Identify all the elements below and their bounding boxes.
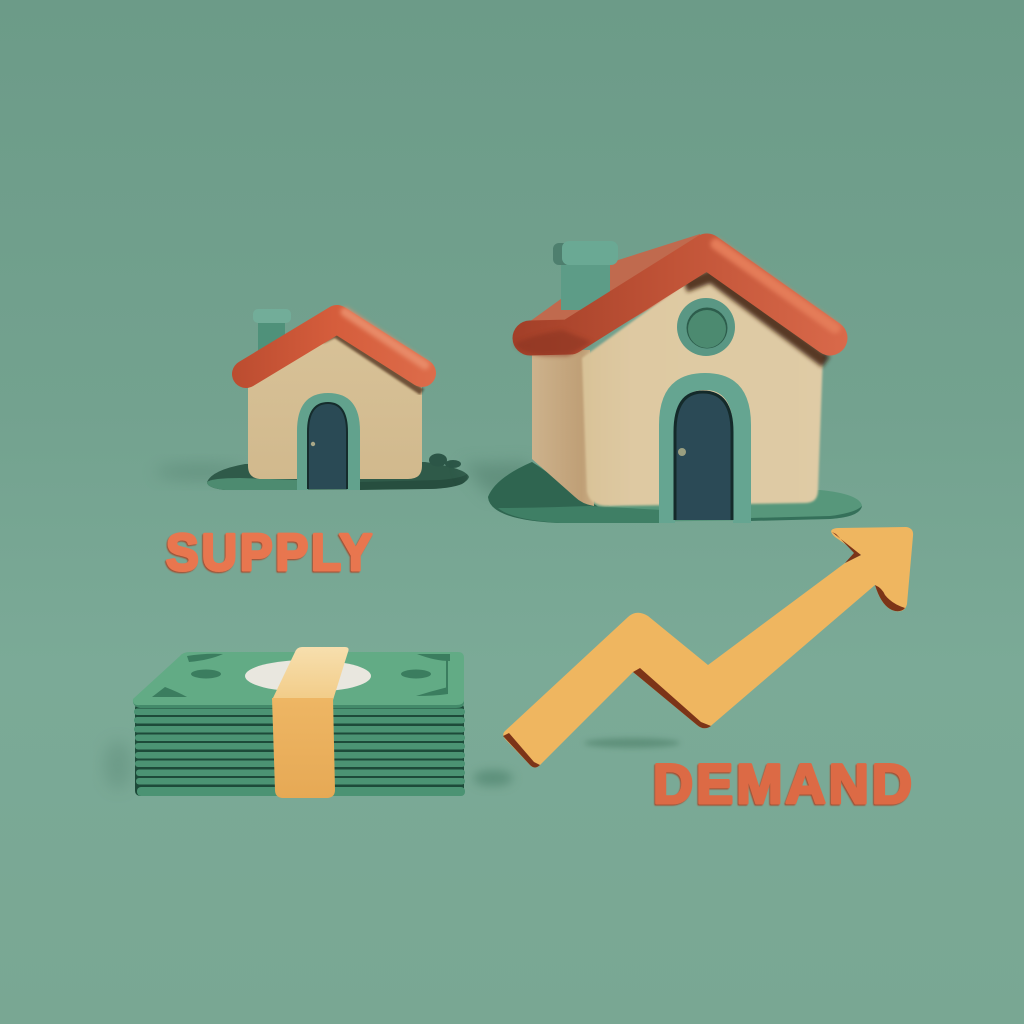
large house round window	[677, 298, 735, 356]
arrow shaded edges	[503, 532, 905, 768]
small house door knob	[311, 442, 315, 446]
small house (supply)	[155, 309, 469, 490]
stacked bills	[134, 703, 465, 796]
small house bushes	[429, 454, 461, 468]
small house walls	[248, 325, 422, 479]
paper band	[272, 647, 349, 798]
large house back roof	[518, 234, 700, 360]
small house door frame	[297, 393, 360, 490]
large house door frame	[659, 373, 751, 523]
arrow body	[503, 527, 913, 768]
small house door shadow	[308, 403, 347, 489]
large house door shadow	[675, 392, 732, 520]
small house roof underside shadow	[322, 334, 422, 392]
large house side wall	[532, 350, 594, 506]
large house (demand)	[462, 234, 862, 523]
large house front wall	[582, 265, 823, 506]
growth arrow	[503, 527, 913, 768]
large house chimney	[553, 241, 618, 310]
small house lawn	[207, 462, 469, 490]
label: demand: DEMAND	[653, 752, 915, 815]
money shadow	[104, 741, 132, 789]
large house ground shadow	[462, 462, 530, 496]
bill corner marks	[152, 654, 450, 697]
money stack	[104, 647, 513, 798]
small house door	[308, 403, 347, 489]
small house ground shadow	[155, 465, 245, 479]
label: supply: SUPPLY	[166, 524, 375, 582]
large house door	[675, 392, 732, 520]
small house chimney	[253, 309, 291, 354]
money right shadow	[473, 770, 513, 786]
large house door knob	[678, 448, 686, 456]
bill centre oval	[245, 660, 371, 692]
large house roof underside shadow	[685, 276, 826, 362]
large house roof	[514, 244, 835, 356]
top bill	[133, 652, 464, 708]
large house lawn	[488, 462, 862, 523]
small house roof	[246, 312, 425, 374]
arrow shadow	[584, 738, 680, 748]
